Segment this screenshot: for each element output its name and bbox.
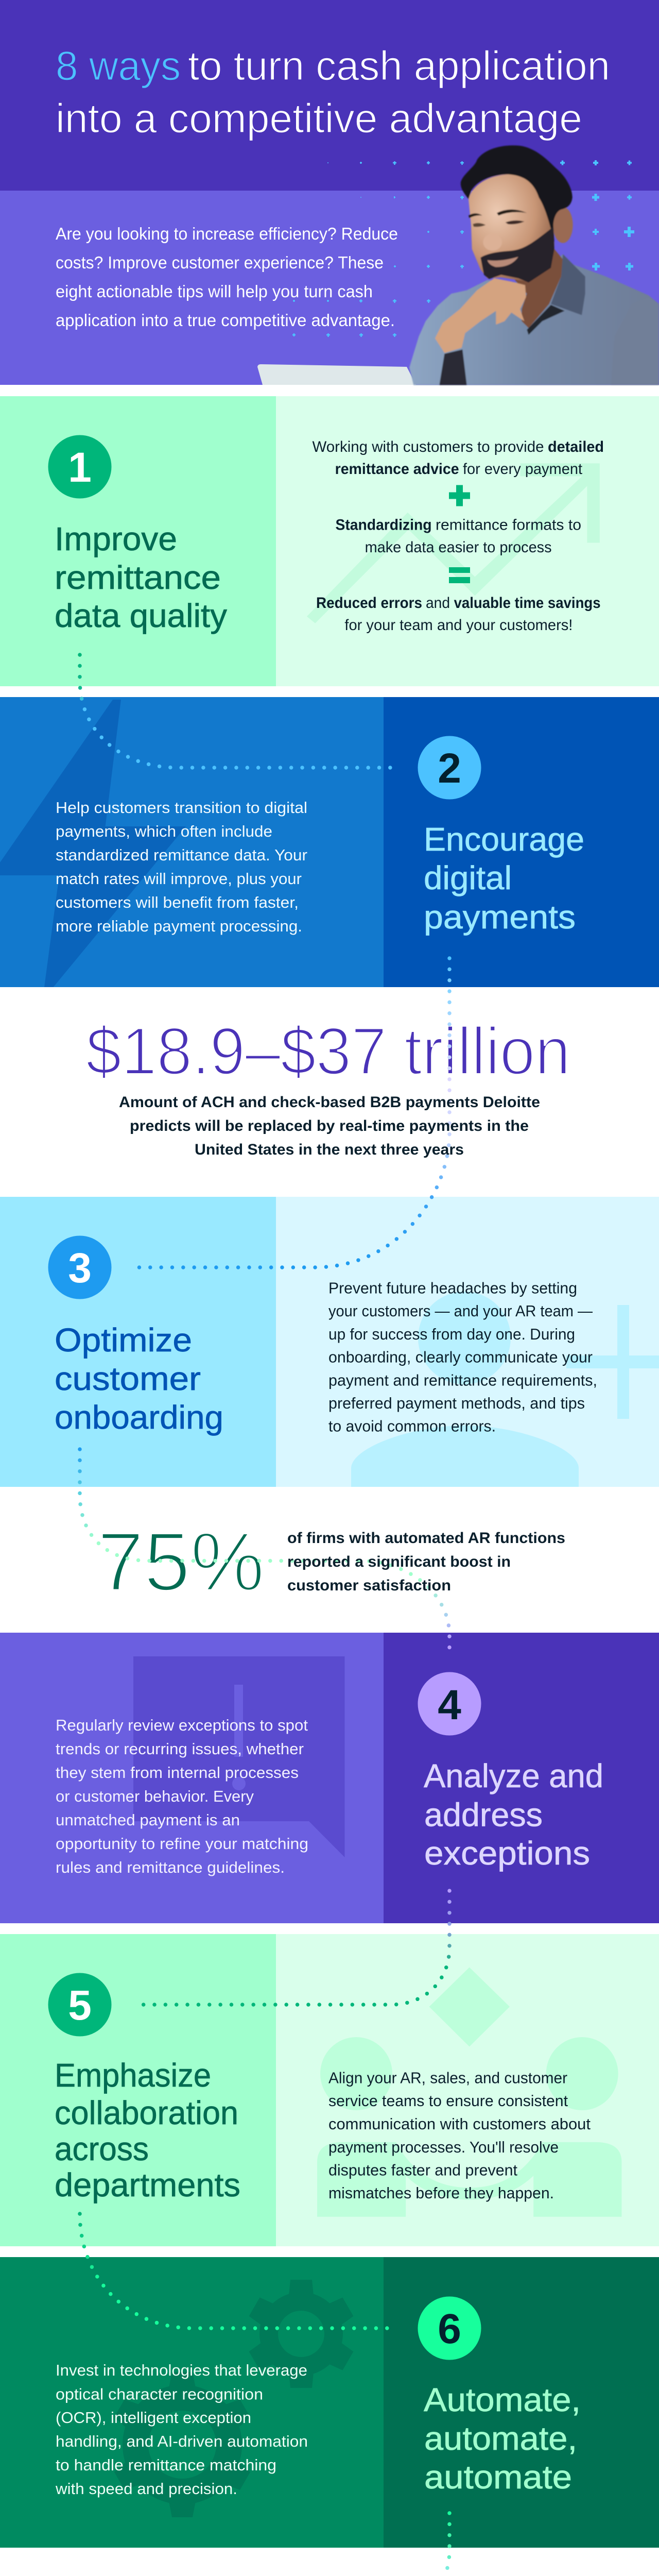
stat caption: real-time payments [119,1094,540,1158]
body: collaboration [328,2069,591,2202]
body: automation: to handle remittance matching [56,2456,276,2474]
heading: emphasize collaboration across departments: across [55,2130,149,2167]
body: remittance equation: Reduced errors [316,595,422,612]
body: remittance equation: for your team and your customers! [344,617,573,634]
stat number: 75%: 75% [97,1515,265,1608]
heading: encourage digital payments: payments [424,899,576,936]
stat caption: real-time payments: United States in the next three years [195,1141,464,1158]
number badge 5 [48,1973,111,2036]
body: remittance equation: for every payment [463,461,583,478]
heading: automate, automate, automate: automate, [424,2420,577,2457]
body: digital payments: standardized remittance data. Your [56,846,307,864]
intro text: eight actionable tips will help you turn cash [56,282,373,301]
heading: analyze and address exceptions [424,1757,603,1872]
heading: emphasize collaboration across departments: collaboration [55,2094,238,2131]
body: automation: handling, and AI-driven automation [56,2432,308,2450]
intro text [56,224,398,330]
body: customer onboarding: preferred payment methods, and tips [328,1394,585,1412]
heading: analyze and address exceptions: address [424,1796,543,1833]
body: exceptions: trends or recurring issues, whether [56,1740,304,1758]
body: collaboration: Align your AR, sales, and customer [328,2069,567,2087]
body: digital payments [56,799,307,935]
photo: thoughtful man [409,145,659,385]
body: exceptions: Regularly review exceptions to spot [56,1716,308,1734]
number badge 4 [418,1672,481,1735]
intro text: application into a true competitive advantage. [56,311,395,330]
stat caption: customer satisfaction: customer satisfaction [287,1577,451,1594]
body: remittance equation: and [426,595,450,612]
body: collaboration: communication with customers about [328,2115,591,2133]
body: exceptions: they stem from internal processes [56,1764,299,1782]
body: automation: (OCR), intelligent exception [56,2409,251,2427]
body: exceptions: or customer behavior. Every [56,1787,254,1805]
body: collaboration: mismatches before they happen. [328,2184,554,2202]
panel: step 3 [0,1197,659,1487]
dotted connector: step 5 to step 6 [80,2214,389,2328]
body: collaboration: payment processes. You'll resolve [328,2138,559,2156]
panel: step 2 [0,697,659,987]
heading: automate, automate, automate [424,2381,581,2496]
number badge 2 [418,736,481,800]
body: customer onboarding: up for success from day one. During [328,1325,575,1343]
heading: emphasize collaboration across departments [55,2057,240,2204]
body: customer onboarding: your customers — and your AR team — [328,1302,593,1320]
body: collaboration: service teams to ensure consistent [328,2092,568,2110]
title: into a competitive advantage [56,95,582,141]
body: digital payments: customers will benefit from faster, [56,893,299,911]
number badge 5: 5 [68,1982,92,2029]
stat caption: customer satisfaction: of firms with automated AR functions [287,1530,565,1547]
panel: step 1 [0,396,659,686]
background icon: speech bubble with exclamation [133,1656,345,1857]
body: digital payments: more reliable payment processing. [56,917,302,935]
dotted connector: step 3 to step 4 [80,1449,449,1657]
plus pattern [292,160,634,337]
body: remittance equation: Working with customers to provide [312,438,544,455]
heading: improve remittance data quality: remittance [55,559,221,596]
panel: hero header [0,0,659,385]
body: automation: Invest in technologies that leverage [56,2361,307,2379]
panel: step 5 [0,1934,659,2246]
background icon: lightning bolt [0,700,186,987]
icon: equals sign [449,567,470,583]
panel: step 6 [0,2257,659,2548]
heading: improve remittance data quality [55,520,227,634]
body: digital payments: match rates will improve, plus your [56,870,302,888]
body: customer onboarding: Prevent future headaches by setting [328,1279,577,1297]
heading: encourage digital payments: digital [424,859,512,896]
dotted connector: step 2 to step 3 [134,958,449,1267]
dotted connector: step 1 to step 2 [80,655,400,768]
body: remittance equation: make data easier to process [365,539,552,556]
body: digital payments: payments, which often include [56,822,272,840]
body: remittance equation: Standardizing [336,516,431,534]
body: customer onboarding: payment and remittance requirements, [328,1371,597,1389]
intro text: Are you looking to increase efficiency? Reduce [56,224,398,243]
number badge 1 [48,435,111,499]
icon: plus sign [449,485,470,506]
heading: optimize customer onboarding: customer [55,1360,201,1397]
body: remittance equation [312,438,604,634]
heading: optimize customer onboarding: onboarding [55,1399,223,1436]
body: remittance equation: detailed [548,438,604,455]
body: automation: with speed and precision. [55,2480,237,2498]
title: to turn cash application [188,43,610,89]
stat number: $18.9–$37 trillion: $18.9–$37 trillion [86,1013,570,1089]
title: 8 ways [56,43,181,89]
body: automation [55,2361,308,2498]
number badge 6 [418,2297,481,2360]
heading: encourage digital payments [424,821,584,936]
heading: optimize customer onboarding [55,1321,223,1436]
number badge 2: 2 [438,745,461,792]
number badge 6: 6 [438,2306,461,2352]
background icon: team with diamond [317,1967,621,2217]
body: collaboration: disputes faster and prevent [328,2161,517,2179]
background icon: gears [113,2280,354,2517]
icon: laptop [257,364,416,385]
stat caption: real-time payments: predicts will be replaced by real-time payments in the [130,1117,529,1134]
heading: emphasize collaboration across departments: Emphasize [55,2057,211,2094]
stat caption: customer satisfaction: reported a significant boost in [287,1553,511,1570]
body: remittance equation: remittance formats to [436,516,581,534]
heading: improve remittance data quality: data quality [55,597,227,634]
body: remittance equation: valuable time savings [454,595,601,612]
body: exceptions [56,1716,308,1876]
body: remittance equation: remittance advice [335,461,459,478]
body: digital payments: Help customers transition to digital [56,799,307,817]
background icon: rising arrow [307,463,600,623]
stat caption: real-time payments: Amount of ACH and check-based B2B payments Deloitte [119,1094,540,1111]
number badge 3 [48,1235,111,1299]
heading: optimize customer onboarding: Optimize [55,1321,192,1359]
body: exceptions: rules and remittance guidelines. [56,1858,285,1876]
background icon: person with plus [351,1292,659,1487]
body: automation: optical character recognition [56,2385,263,2403]
stat caption: customer satisfaction [287,1530,565,1594]
body: customer onboarding: onboarding, clearly communicate your [328,1348,593,1366]
body: exceptions: unmatched payment is an [56,1811,240,1829]
title [56,43,610,141]
number badge 4: 4 [438,1682,461,1728]
heading: analyze and address exceptions: Analyze and [424,1757,603,1794]
body: customer onboarding [328,1279,597,1435]
heading: encourage digital payments: Encourage [424,821,584,858]
dotted connector: step 6 to step 7 [80,2513,449,2576]
body: customer onboarding: to avoid common errors. [328,1417,496,1435]
heading: automate, automate, automate: Automate, [424,2381,581,2418]
body: exceptions: opportunity to refine your matching [56,1835,308,1853]
heading: automate, automate, automate: automate [424,2459,572,2496]
intro text: costs? Improve customer experience? These [56,253,384,272]
dotted connector: step 4 to step 5 [134,1891,449,2005]
heading: improve remittance data quality: Improve [55,520,177,557]
number badge 1: 1 [68,444,92,491]
number badge 3: 3 [68,1245,92,1292]
panel: step 4 [0,1633,659,1923]
heading: analyze and address exceptions: exceptions [424,1835,590,1872]
heading: emphasize collaboration across departments: departments [55,2166,240,2204]
